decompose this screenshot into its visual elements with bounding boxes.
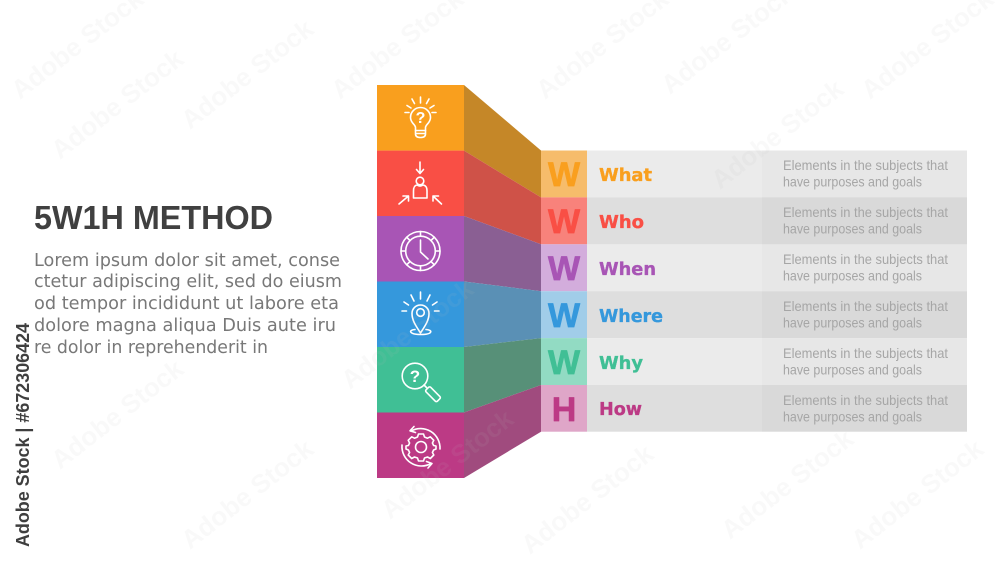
description: Where: Elements in the subjects that [783, 298, 948, 314]
description: How [783, 392, 948, 424]
side credit text: Adobe Stock | #672306424 [13, 323, 33, 547]
icon: location pin with rays [402, 292, 439, 334]
perspective side panels [464, 85, 541, 478]
intro text block: ctetur adipiscing elit, sed do eiusm [34, 271, 342, 292]
table rows panel [587, 150, 967, 432]
icon: person with inward arrows [399, 162, 442, 204]
tile: When W: W [548, 250, 581, 288]
label: How: How [599, 399, 642, 420]
label: What: What [599, 165, 652, 186]
description: What: Elements in the subjects that [783, 157, 948, 173]
description: Who: Elements in the subjects that [783, 204, 948, 220]
tile: Who W: W [548, 203, 581, 241]
description: Where [783, 298, 948, 330]
icon: clock [401, 232, 440, 270]
description: Why [783, 345, 948, 378]
letter tiles column [541, 150, 587, 432]
description: What [783, 157, 948, 190]
label: When: When [599, 259, 656, 280]
tile: How H [541, 385, 587, 432]
description: Why: Elements in the subjects that [783, 345, 948, 361]
tile: Who W [541, 197, 587, 244]
stock watermarks: Adobe Stock [715, 423, 859, 545]
tile: What W [541, 150, 587, 197]
stock watermarks: Adobe Stock [45, 353, 189, 475]
intro text block: od tempor incididunt ut labore eta [34, 293, 339, 314]
title: 5W1H METHOD [34, 200, 273, 237]
description: How: Elements in the subjects that [783, 392, 948, 408]
stock watermarks: Adobe Stock [335, 273, 479, 395]
icon: magnifier with question mark: ? [410, 367, 420, 386]
intro text block: dolore magna aliqua Duis aute iru [34, 315, 336, 336]
description: When [783, 251, 948, 284]
tile: Why W: W [548, 344, 581, 382]
label: Why: Why [599, 353, 643, 374]
tile: Where W [541, 291, 587, 338]
icon: gear with circular arrows [402, 426, 440, 468]
label: Who: Who [599, 212, 644, 233]
tile: What W: W [548, 156, 581, 194]
description: What: have purposes and goals [783, 174, 922, 190]
stock watermarks: Adobe Stock [175, 13, 319, 135]
stock watermarks: Adobe Stock [845, 433, 989, 555]
icon: light bulb with question mark [405, 97, 436, 138]
intro text block [34, 250, 342, 358]
label: Where: Where [599, 306, 663, 327]
tile: Why W [541, 338, 587, 385]
tile: Where W: W [548, 297, 581, 335]
stock watermarks: Adobe Stock [515, 438, 659, 560]
icon: magnifier with question mark [402, 363, 441, 402]
description: Who: have purposes and goals [783, 220, 922, 236]
description: Who [783, 204, 948, 236]
stock watermarks: Adobe Stock [45, 43, 189, 165]
description: Why: have purposes and goals [783, 362, 922, 378]
stock watermarks: Adobe Stock [175, 433, 319, 555]
description: How: have purposes and goals [783, 408, 922, 424]
description: When: have purposes and goals [783, 268, 922, 284]
stock watermarks: Adobe Stock [705, 73, 849, 195]
intro text block: Lorem ipsum dolor sit amet, conse [34, 250, 340, 271]
tile: How H: H [552, 391, 576, 429]
intro text block: re dolor in reprehenderit in [34, 337, 268, 358]
description: Where: have purposes and goals [783, 314, 922, 330]
icon: light bulb with question mark: ? [416, 110, 425, 127]
front colour column [377, 85, 464, 478]
tile: When W [541, 244, 587, 291]
description: When: Elements in the subjects that [783, 251, 948, 267]
stock watermarks: Adobe Stock [375, 403, 519, 525]
